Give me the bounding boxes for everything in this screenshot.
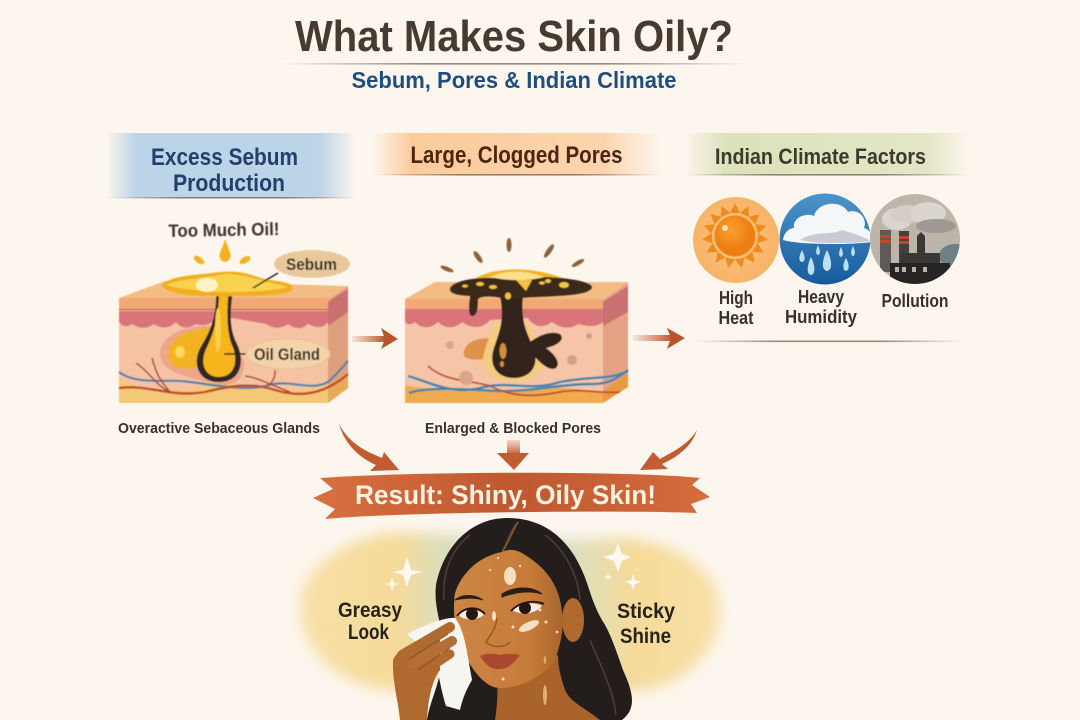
callout: oil gland <box>224 339 330 369</box>
facial features <box>455 588 544 669</box>
hair strands <box>444 522 616 715</box>
oil gland <box>160 290 244 385</box>
skin shine <box>489 557 558 705</box>
icon: burst marks <box>440 238 585 274</box>
label: heavy humidity: Heavy <box>798 287 844 307</box>
sebum pool <box>162 272 293 296</box>
icon: pollution factory <box>870 194 960 284</box>
heading: excess sebum production: Excess Sebum <box>151 144 298 171</box>
face <box>454 550 563 688</box>
sparkles <box>385 543 641 591</box>
arrow: pores to result <box>497 440 529 470</box>
label: high heat: Heat <box>718 308 754 328</box>
arrow: sebum to pores <box>352 328 398 349</box>
label: sticky shine: Sticky <box>617 600 675 623</box>
caption: enlarged and blocked pores: Enlarged & Blocked Pores <box>425 420 601 437</box>
caption: overactive sebaceous glands: Overactive Sebaceous Glands <box>118 420 320 437</box>
neck and shoulder <box>495 655 600 720</box>
hair parting <box>502 522 518 552</box>
result banner: Result: Shiny, Oily Skin! <box>355 480 656 510</box>
heading: indian climate factors: Indian Climate Factors <box>715 144 926 169</box>
callout: sebum <box>253 250 350 288</box>
hand <box>393 627 452 720</box>
label: sticky shine <box>617 600 675 648</box>
panel: excess sebum skin diagram <box>119 219 350 403</box>
subtitle: Sebum, Pores & Indian Climate <box>352 67 676 93</box>
heading: indian climate factors <box>685 133 970 176</box>
glow: left <box>300 532 475 690</box>
label: high heat: High <box>719 288 753 308</box>
heading: excess sebum production: Production <box>173 170 285 197</box>
ear <box>562 598 584 642</box>
label: greasy look <box>338 599 402 644</box>
icon: sun <box>693 197 779 283</box>
label: high heat <box>718 288 754 328</box>
infographic canvas <box>110 20 966 720</box>
arrow: climate to result <box>640 430 697 470</box>
label: sticky shine: Shine <box>620 625 671 648</box>
tissue <box>407 618 472 710</box>
arrow: sebum to result <box>339 424 399 471</box>
label: heavy humidity <box>785 287 857 327</box>
glow: right <box>550 538 720 692</box>
hair <box>427 518 632 720</box>
callout: oil gland: Oil Gland <box>254 346 320 364</box>
label: too much oil: Too Much Oil! <box>168 219 280 241</box>
heading: excess sebum production <box>106 133 356 199</box>
arrow: pores to climate <box>633 328 685 349</box>
heading: large clogged pores <box>372 133 662 176</box>
icon: oil drops <box>192 239 252 266</box>
panel: clogged pores skin diagram <box>405 238 628 403</box>
skin block <box>405 282 628 403</box>
heading: large clogged pores: Large, Clogged Pores <box>410 142 622 169</box>
label: greasy look: Look <box>348 621 389 644</box>
skin block <box>119 281 348 403</box>
blocked oil plug <box>450 269 592 316</box>
clogged pore <box>464 296 562 382</box>
callout: sebum: Sebum <box>286 256 337 274</box>
woman wiping face <box>393 518 632 720</box>
title: What Makes Skin Oily? <box>295 12 733 61</box>
result banner <box>313 473 710 519</box>
label: greasy look: Greasy <box>338 599 402 622</box>
icon: rain cloud <box>780 194 871 284</box>
label: pollution: Pollution <box>882 291 948 311</box>
label: heavy humidity: Humidity <box>785 307 857 327</box>
